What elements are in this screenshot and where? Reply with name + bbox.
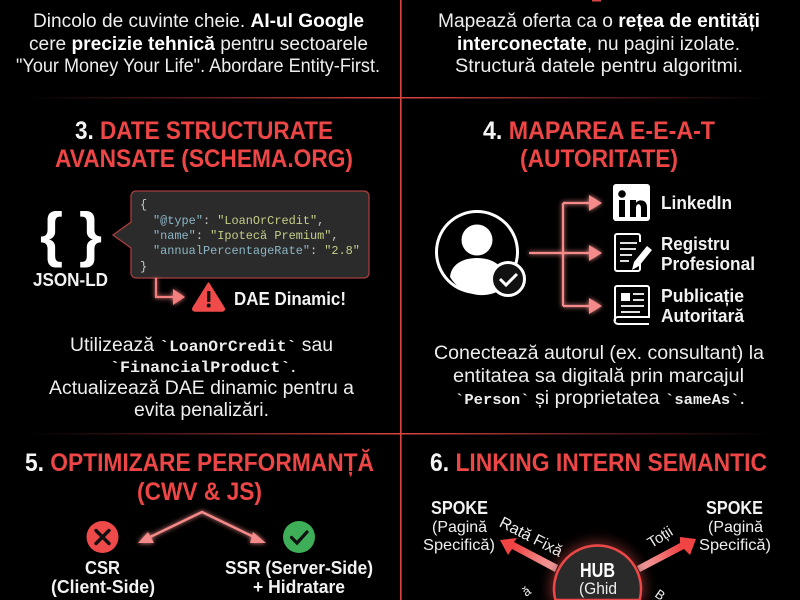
- arrows: author to entities: [529, 195, 602, 314]
- heading: section 4: 4. MAPAREA E-E-A-T: [483, 117, 715, 145]
- panel: section 5 performance: [25, 448, 374, 597]
- panel: section 4 E-E-A-T: [434, 117, 764, 409]
- label: lower spoke links: [519, 583, 668, 600]
- panel: section 1 description: cere precizie tehnică pentru sectoarele: [29, 34, 368, 55]
- label: CSR: CSR: [85, 558, 120, 578]
- code callout: "@type": "LoanOrCredit",: [153, 214, 324, 228]
- label: left spoke: (Pagină: [432, 519, 487, 536]
- label: Publicație Autoritară: Publicație: [661, 286, 744, 306]
- panel: section 2 description: interconectate, nu pagini izolate.: [457, 34, 740, 55]
- panel: section 2 description: [438, 11, 760, 77]
- hub node: [554, 546, 641, 600]
- label: right spoke: SPOKE: [706, 498, 763, 518]
- label: Publicație Autoritară: Autoritară: [661, 306, 745, 326]
- heading: section 6: 6. LINKING INTERN SEMANTIC: [430, 449, 767, 477]
- heading: section 5: (CWV & JS): [137, 478, 262, 506]
- arrows: rendering choice: [138, 512, 266, 543]
- heading: section 3: 3. DATE STRUCTURATE: [75, 117, 333, 145]
- arrow: hub to right spoke: [637, 537, 696, 572]
- heading: section 4: [483, 117, 715, 173]
- panel: section 1 description: [16, 11, 380, 77]
- label: Publicație Autoritară: [661, 286, 745, 326]
- code callout: "annualPercentageRate": "2.8": [153, 244, 360, 258]
- icon: authoritative publication: [614, 286, 649, 324]
- label: LinkedIn: LinkedIn: [661, 193, 732, 213]
- label: lower spoke links: ă: [519, 583, 534, 599]
- arrow: hub to left spoke: [500, 538, 558, 572]
- label: Registru Profesional: [661, 234, 755, 274]
- code callout: "name": "Ipotecă Premium",: [153, 229, 339, 243]
- panel: section 2 description: Mapează oferta ca o rețea de entități: [438, 11, 760, 32]
- heading: section 5: 5. OPTIMIZARE PERFORMANȚĂ: [25, 448, 374, 477]
- code callout: {: [140, 198, 147, 212]
- icon: JSON-LD braces: }: [79, 201, 102, 268]
- text block: section 4 description: entitatea sa digitală prin marcajul: [453, 366, 744, 387]
- icon: professional register: [615, 234, 652, 271]
- panel: section 2 description: Structură datele pentru algoritmi.: [455, 56, 743, 77]
- icon: LinkedIn: [613, 184, 650, 221]
- label: SSR: [225, 558, 373, 597]
- text block: section 4 description: Conectează autorul (ex. consultant) la: [434, 343, 764, 364]
- label: left spoke: [423, 498, 495, 554]
- label: SSR: SSR (Server-Side): [225, 558, 373, 578]
- heading: section 3: AVANSATE (SCHEMA.ORG): [55, 145, 353, 173]
- code callout: [113, 191, 369, 278]
- text block: section 3 description: Actualizează DAE dinamic pentru a: [49, 378, 354, 399]
- icon: JSON-LD braces: [40, 201, 102, 268]
- panel: section 3 structured data: [33, 117, 369, 421]
- icon: verified author: [436, 212, 524, 296]
- label: Registru Profesional: Profesional: [661, 254, 755, 274]
- label: Toții: Toții: [644, 523, 676, 552]
- text block: section 4 description: `Person` și proprietatea `sameAs`.: [455, 388, 745, 409]
- icon: CSR cross: [86, 521, 118, 553]
- label: DAE Dinamic: DAE Dinamic!: [234, 289, 346, 309]
- label: Rată Fixă: Rată Fixă: [496, 514, 565, 561]
- hub node: (Ghid: [579, 579, 617, 598]
- label: left spoke: Specifică): [423, 537, 495, 554]
- text block: section 3 description: Utilizează `LoanOrCredit` sau: [70, 335, 333, 356]
- label: right spoke: Specifică): [699, 537, 771, 554]
- label: Registru Profesional: Registru: [661, 234, 730, 254]
- label: CSR: (Client-Side): [51, 577, 155, 597]
- heading: section 4: (AUTORITATE): [520, 145, 678, 173]
- icon: SSR check: [283, 521, 315, 553]
- label: SSR: + Hidratare: [253, 577, 345, 597]
- arrow: code to warning: [156, 278, 185, 305]
- hub node: HUB: [580, 560, 615, 582]
- heading: section 3: [55, 117, 353, 173]
- label: right spoke: [699, 498, 771, 554]
- panel: section 1 description: Dincolo de cuvinte cheie. AI-ul Google: [33, 11, 364, 32]
- label: JSON-LD: JSON-LD: [33, 270, 108, 290]
- label: right spoke: (Pagină: [708, 519, 763, 536]
- code callout: }: [140, 260, 147, 274]
- label: left spoke: SPOKE: [431, 498, 488, 518]
- text block: section 3 description: `FinancialProduct` .: [110, 356, 296, 377]
- text block: section 3 description: evita penalizări.: [134, 400, 269, 421]
- heading: section 5: [25, 448, 374, 506]
- icon: JSON-LD braces: {: [40, 201, 63, 268]
- panel: section 6 internal linking: [423, 449, 771, 600]
- text block: section 3 description: [49, 335, 354, 421]
- icon: warning triangle: [193, 283, 224, 311]
- panel: section 1 description: "Your Money Your Life". Abordare Entity-First.: [16, 56, 380, 77]
- label: CSR: [51, 558, 155, 597]
- text block: section 4 description: [434, 343, 764, 409]
